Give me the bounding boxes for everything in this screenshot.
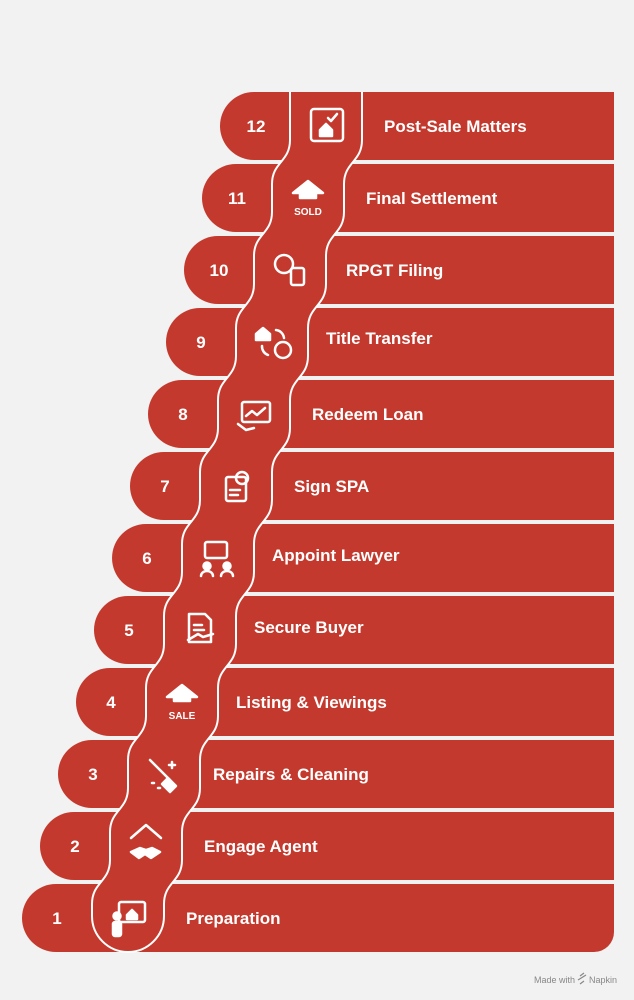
step labels: RPGT Filing [346,261,443,280]
icon column snake [92,92,362,952]
step labels [186,117,527,928]
icon: post-sale document [311,109,343,141]
icon: sold [293,181,323,218]
icon: preparation [113,902,145,936]
step numbers: 8 [178,405,188,424]
footer credit [534,973,617,985]
step numbers: 3 [88,765,98,784]
step labels: Listing & Viewings [236,693,387,712]
step labels: Title Transfer [326,329,433,348]
step numbers: 6 [142,549,152,568]
icon: title transfer [256,328,291,358]
step labels: Appoint Lawyer [272,546,400,565]
footer credit: Napkin [589,975,617,985]
step labels: Engage Agent [204,837,318,856]
icon: lawyer [201,542,233,576]
step numbers: 11 [228,189,246,208]
step labels: Repairs & Cleaning [213,765,369,784]
step numbers: 1 [52,909,62,928]
step numbers: 2 [70,837,80,856]
icon: redeem loan [238,402,270,430]
icon: engage agent [131,825,161,858]
step labels: Preparation [186,909,280,928]
icon: sale: SALE [169,711,196,722]
step numbers: 7 [160,477,170,496]
step numbers: 9 [196,333,206,352]
icon: sign spa [226,472,248,501]
icon: secure buyer [188,614,213,642]
step labels: Sign SPA [294,477,369,496]
icon: sale [167,685,197,722]
step labels: Redeem Loan [312,405,423,424]
step labels: Final Settlement [366,189,498,208]
step numbers: 5 [124,621,134,640]
step numbers [52,117,265,928]
icon: repairs [150,760,176,792]
step labels: Post-Sale Matters [384,117,527,136]
step numbers: 12 [247,117,265,136]
icon: sold: SOLD [294,207,322,218]
icons [113,109,343,936]
step numbers: 10 [210,261,228,280]
step labels: Secure Buyer [254,618,364,637]
icon: rpgt [275,255,304,285]
footer credit: Made with [534,975,575,985]
step numbers: 4 [106,693,116,712]
